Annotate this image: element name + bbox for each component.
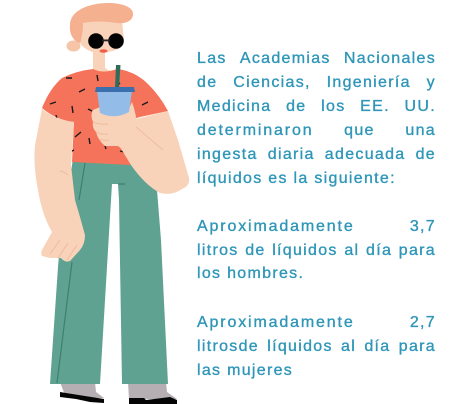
text: determinaron — [197, 122, 313, 139]
text: Las — [197, 50, 227, 67]
text: men's intake — [196, 218, 436, 282]
text: adecuada — [325, 146, 406, 163]
text: UU. — [405, 98, 436, 115]
text: día — [364, 338, 391, 355]
text: para — [399, 242, 436, 259]
text: Ingeniería — [327, 74, 411, 91]
text: 2,7 — [410, 314, 436, 331]
socks — [60, 382, 177, 399]
text: ingesta — [197, 146, 258, 163]
shirt — [42, 69, 168, 165]
text: women's intake — [196, 314, 436, 379]
text: de — [245, 242, 266, 259]
text: día — [366, 242, 392, 259]
sunglasses — [88, 33, 124, 49]
text: Ciencias, — [233, 74, 311, 91]
text: Aproximadamente — [197, 218, 355, 235]
straw — [115, 65, 120, 88]
text: los — [321, 98, 346, 115]
text: líquidos — [272, 242, 338, 259]
hand lines — [93, 122, 163, 150]
hair — [70, 3, 133, 43]
text: diaria — [268, 146, 315, 163]
shoes — [60, 392, 177, 404]
text: Medicina — [197, 98, 271, 115]
text: intro paragraph — [197, 50, 436, 187]
cup — [97, 91, 132, 116]
text: y — [427, 74, 436, 91]
text: 3,7 — [410, 218, 436, 235]
text: EE. — [360, 98, 390, 115]
text: para — [399, 338, 436, 355]
text: Academias — [240, 50, 331, 67]
left arm — [34, 109, 85, 262]
text: al — [344, 242, 359, 259]
neck and face — [78, 20, 124, 73]
text: líquidos es la siguiente: — [197, 170, 396, 187]
cup lid — [95, 87, 135, 92]
text: líquidos — [267, 338, 333, 355]
right arm — [120, 111, 189, 194]
shirt speckles — [50, 75, 148, 152]
text: Aproximadamente — [197, 314, 355, 331]
text: litrosde — [197, 338, 259, 355]
finger lines — [50, 171, 77, 260]
text: de — [286, 98, 306, 115]
ear — [66, 40, 80, 52]
text: los hombres. — [197, 265, 304, 282]
text: Nacionales — [344, 50, 436, 67]
text: de — [197, 74, 217, 91]
text: litros — [197, 242, 239, 259]
text: que — [344, 122, 375, 139]
trouser crease — [57, 163, 125, 383]
lips — [100, 49, 108, 53]
trousers — [50, 158, 168, 384]
text: de — [416, 146, 436, 163]
text: una — [405, 122, 436, 139]
hand — [92, 102, 137, 150]
text: las mujeres — [197, 362, 293, 379]
text: al — [341, 338, 356, 355]
